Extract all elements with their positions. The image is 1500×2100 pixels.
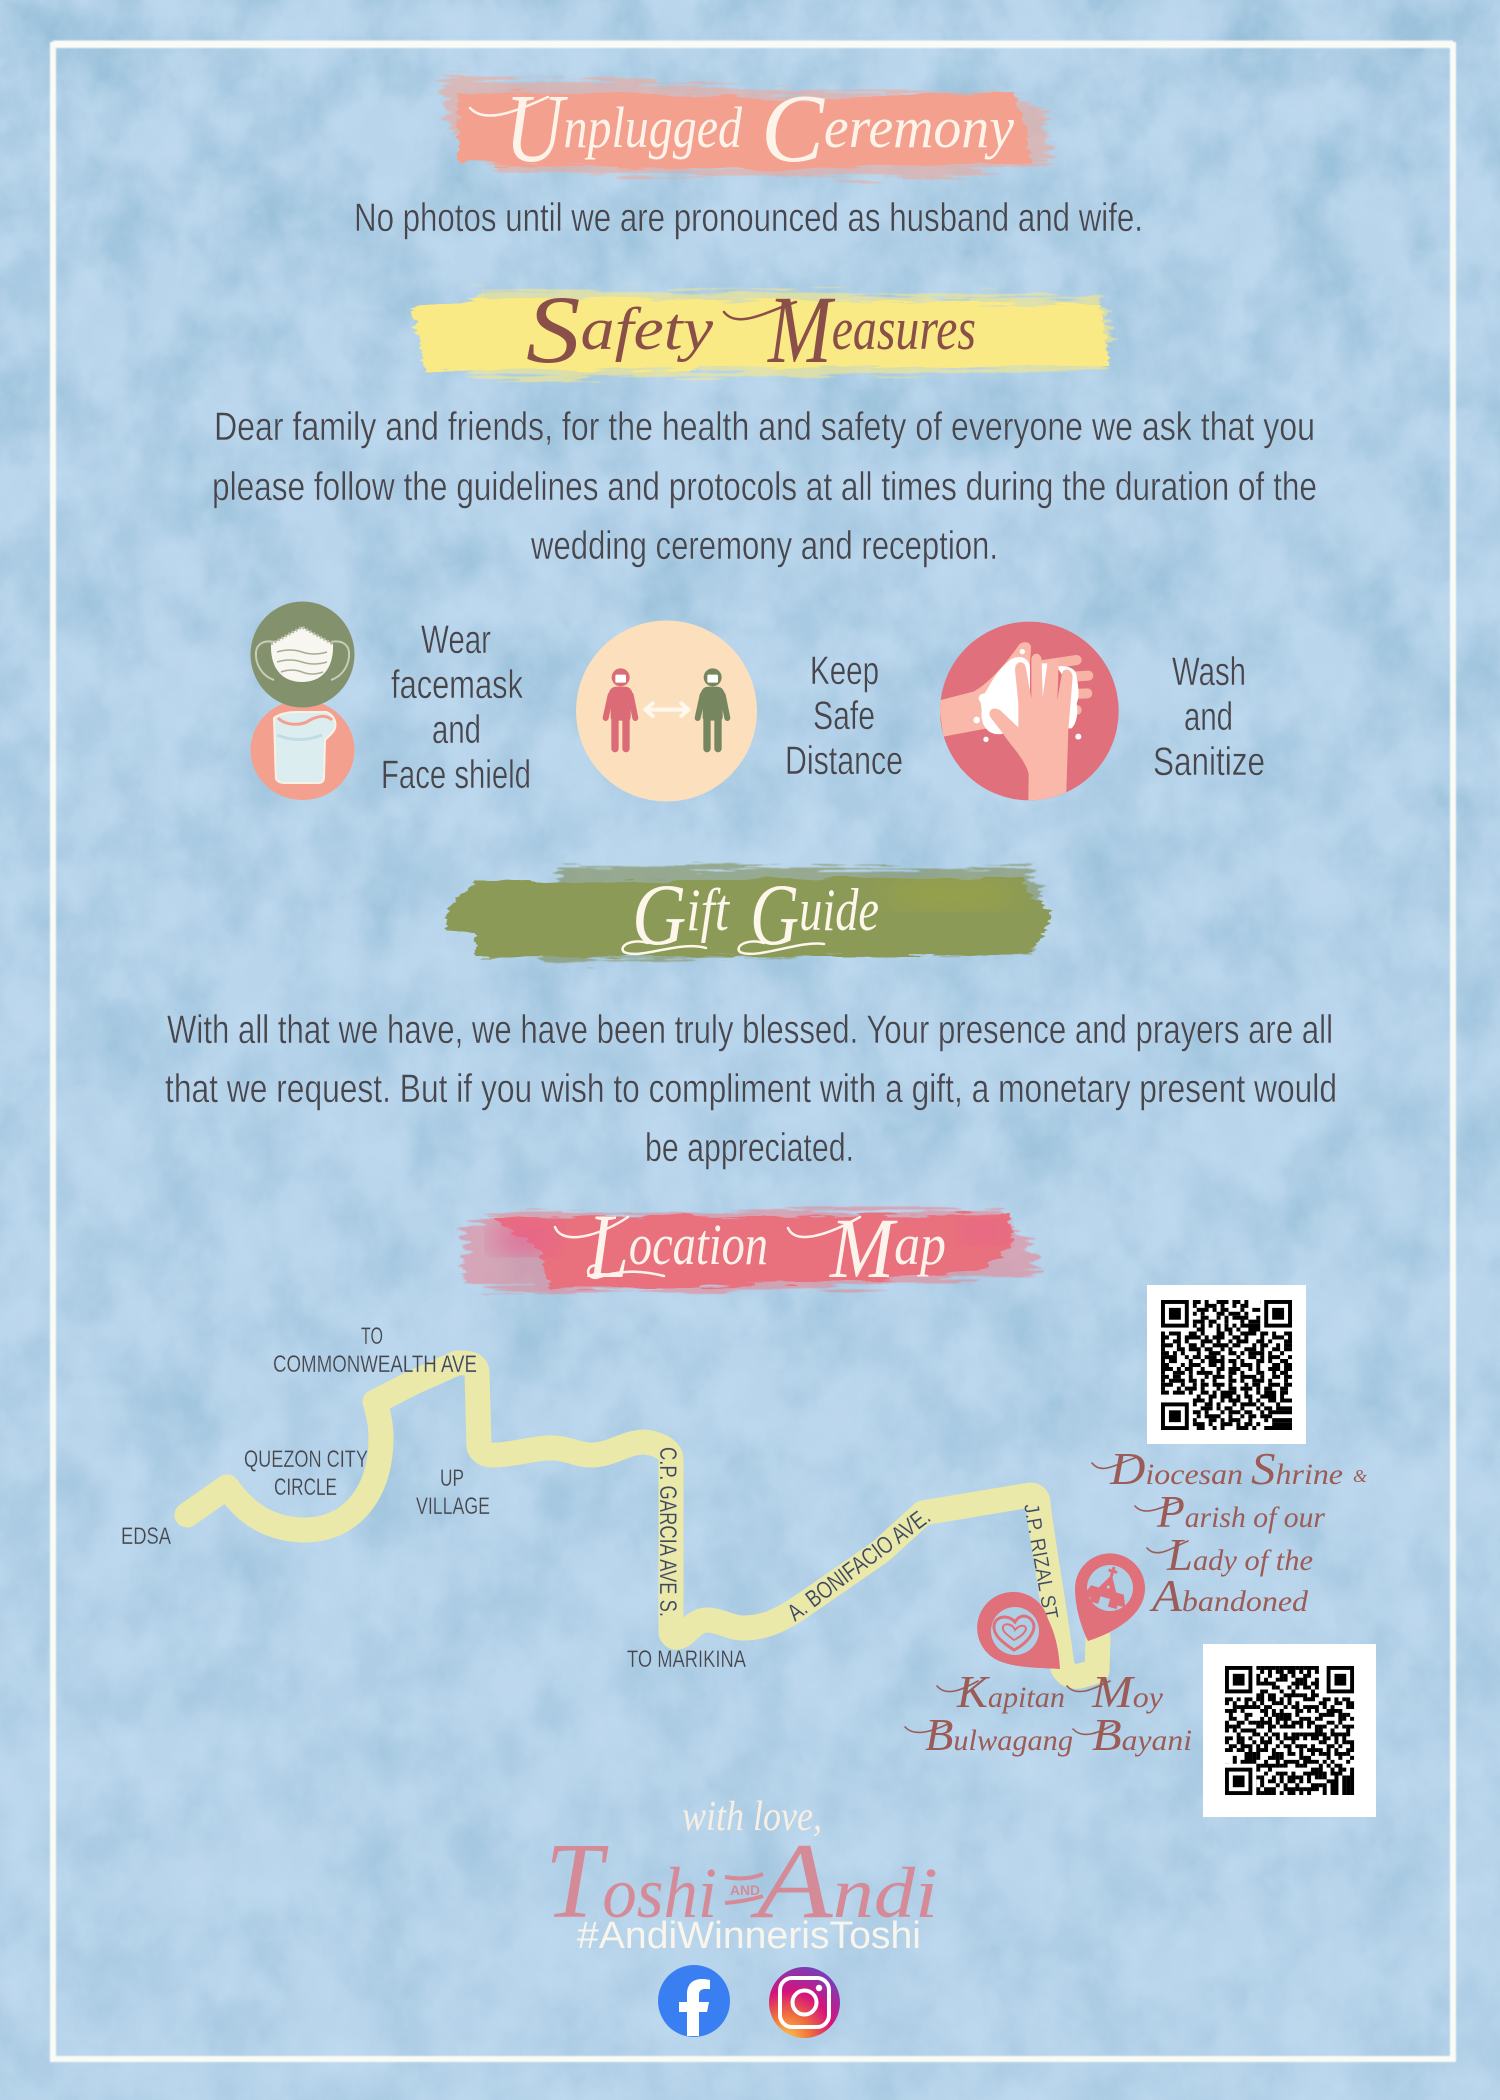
text: wear facemask and face shield: and — [432, 708, 481, 752]
text: church name: Lady of the — [1166, 1529, 1313, 1580]
map labels: TO — [361, 1323, 383, 1350]
swash: and — [725, 1874, 763, 1903]
section: safety measures — [93, 276, 1406, 568]
icon: facebook — [658, 1965, 730, 2037]
person: red — [606, 668, 635, 749]
logo: Toshi and Andi: Toshi — [545, 1822, 717, 1941]
divider line — [93, 338, 1406, 342]
title: Unplugged Ceremony: U — [505, 75, 569, 183]
qr code: church — [1147, 1285, 1306, 1444]
qr code: reception — [1203, 1644, 1376, 1817]
map labels: COMMONWEALTH AVE — [273, 1351, 477, 1378]
text: church name: Diocesan Shrine — [1109, 1443, 1343, 1494]
text: church name: & — [1353, 1466, 1367, 1486]
section: gift guide — [93, 866, 1406, 1170]
map labels: CIRCLE — [274, 1474, 337, 1501]
text: wash and sanitize — [1153, 650, 1265, 784]
pin: church — [1075, 1553, 1145, 1641]
title: Unplugged Ceremony: nplugged — [564, 95, 743, 160]
swash: and: AND — [730, 1882, 760, 1898]
map labels: TO MARIKINA — [627, 1646, 746, 1673]
map labels: J.P. RIZAL ST. — [1019, 1502, 1063, 1624]
logo: Toshi and Andi — [545, 1822, 938, 1941]
title: Gift Guide: ift — [686, 877, 730, 943]
icon: face mask — [250, 602, 354, 708]
text: reception venue: Bayani — [1092, 1709, 1192, 1760]
brush stroke: yellow — [412, 290, 1112, 378]
text: keep safe distance: Safe — [813, 694, 875, 738]
map labels — [121, 1323, 1063, 1673]
text: wash and sanitize: Sanitize — [1153, 740, 1265, 784]
text: wear facemask and face shield: Face shield — [381, 753, 531, 797]
text: safety paragraph: wedding ceremony and reception. — [530, 524, 998, 568]
text: reception venue: Bulwagang — [925, 1709, 1073, 1760]
logo: Toshi and Andi: Andi — [750, 1822, 938, 1941]
title: Unplugged Ceremony — [470, 75, 1014, 183]
map labels: C.P. GARCIA AVE S. — [654, 1447, 681, 1617]
text: reception venue: Kapitan — [956, 1666, 1065, 1717]
icon: instagram — [769, 1967, 840, 2038]
title: Location Map: M — [828, 1200, 898, 1296]
map labels: QUEZON CITY — [244, 1446, 368, 1473]
title: Location Map — [555, 1195, 946, 1297]
text: reception venue — [905, 1666, 1192, 1760]
text: safety paragraph — [212, 405, 1317, 568]
divider line — [93, 1253, 1406, 1257]
hashtag: #AndiWinnerisToshi — [577, 1915, 921, 1957]
title: Unplugged Ceremony: eremony — [824, 95, 1014, 160]
text: wear facemask and face shield: Wear — [421, 618, 491, 662]
text: gift paragraph — [165, 1008, 1337, 1170]
text: wash and sanitize: Wash — [1172, 650, 1246, 694]
text: keep safe distance — [785, 649, 903, 783]
title: Safety Measures: easures — [832, 296, 976, 362]
brush stroke: rose — [464, 1208, 1040, 1292]
section: location map — [93, 1195, 1406, 1297]
text: church name: Abandoned — [1149, 1570, 1309, 1621]
text: church name — [1092, 1443, 1367, 1621]
title: Unplugged Ceremony: C — [761, 75, 825, 183]
title: Safety Measures: S — [526, 276, 581, 383]
text: church name: Parish of our — [1156, 1486, 1325, 1537]
text: keep safe distance: Keep — [810, 649, 879, 693]
text: no photos: No photos until we are pronounced as husband and wife. — [354, 196, 1143, 240]
title: Gift Guide: uide — [799, 877, 879, 943]
title: Safety Measures — [526, 276, 976, 383]
brush stroke: olive — [446, 866, 1050, 962]
icon: face shield — [250, 700, 354, 800]
text: with love: with love, — [682, 1794, 822, 1840]
map road — [187, 1363, 1098, 1676]
map labels: EDSA — [121, 1523, 171, 1550]
icon: safe distance — [576, 620, 757, 802]
section: unplugged ceremony — [93, 75, 1406, 240]
title: Safety Measures: afety — [581, 296, 713, 362]
brush stroke: salmon — [442, 78, 1050, 178]
map labels: UP — [440, 1465, 464, 1492]
icon: washing hands — [938, 622, 1119, 802]
divider line — [93, 926, 1406, 930]
title: Gift Guide — [623, 867, 879, 964]
text: reception venue: Moy — [1091, 1666, 1164, 1717]
text: wear facemask and face shield: facemask — [391, 663, 524, 707]
text: keep safe distance: Distance — [785, 739, 903, 783]
person: green — [698, 668, 727, 749]
text: gift paragraph: be appreciated. — [645, 1126, 854, 1170]
title: Safety Measures: M — [766, 276, 836, 383]
title: Location Map: ocation — [629, 1212, 768, 1277]
text: wash and sanitize: and — [1184, 695, 1233, 739]
map labels: VILLAGE — [416, 1493, 490, 1520]
text: wear facemask and face shield — [381, 618, 531, 797]
pin: heart — [977, 1592, 1060, 1669]
map labels: A. BONIFACIO AVE. — [782, 1503, 936, 1627]
title: Gift Guide: G — [632, 867, 686, 964]
title: Location Map: L — [586, 1195, 629, 1297]
title: Location Map: ap — [894, 1212, 946, 1277]
arrow: distance — [645, 703, 689, 716]
divider line — [93, 137, 1406, 141]
title: Gift Guide: G — [750, 867, 799, 964]
